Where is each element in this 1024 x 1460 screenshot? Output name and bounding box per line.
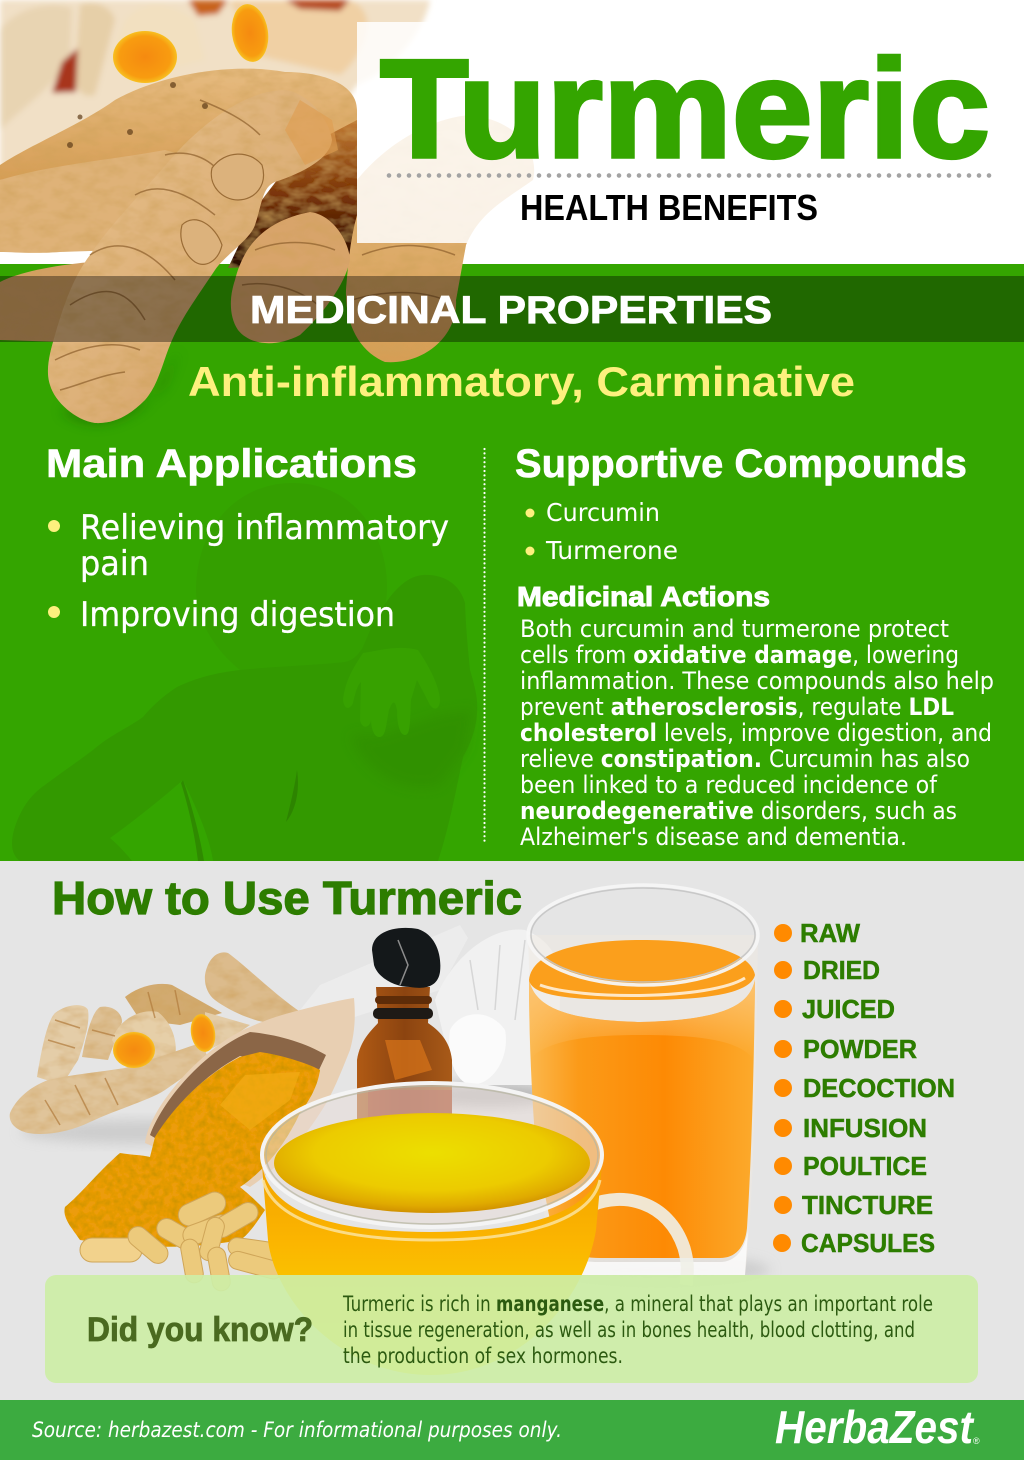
use form: decoction: DECOCTION xyxy=(803,1073,955,1103)
shadows xyxy=(20,1120,280,1144)
green medicinal section background xyxy=(0,264,1024,861)
illustration: turmeric roots header image xyxy=(0,0,534,424)
heading: supportive compounds: Supportive Compounds xyxy=(515,442,967,486)
medicinal properties band xyxy=(0,276,1024,342)
dark gap behind fingers xyxy=(228,120,357,268)
finger shadows on green xyxy=(60,350,180,424)
source note: Source: herbazest.com - For informational purposes only. xyxy=(32,1418,562,1442)
use form: infusion: INFUSION xyxy=(803,1113,927,1143)
panel: did you know xyxy=(45,1275,978,1383)
grey how-to-use section background xyxy=(0,861,1024,1400)
medicinal actions paragraph: Both curcumin and turmerone protect xyxy=(520,615,949,643)
title panel backdrop xyxy=(357,22,1024,243)
medicinal actions paragraph xyxy=(520,615,994,851)
heading: main applications: Main Applications xyxy=(46,442,417,486)
bullet item: relieving inflammatory pain: Relieving inflammatory xyxy=(80,508,449,548)
root knobs xyxy=(181,154,263,264)
heading: medicinal properties: MEDICINAL PROPERTIES xyxy=(250,289,772,332)
compound: turmerone: Turmerone xyxy=(545,536,678,565)
use form: poultice: POULTICE xyxy=(803,1151,927,1181)
medicinal actions paragraph: inflammation. These compounds also help xyxy=(520,667,994,695)
icon: capsules xyxy=(80,1188,284,1292)
panel: main applications xyxy=(46,442,449,635)
use form: dried: DRIED xyxy=(803,955,880,985)
did you know text: the production of sex hormones. xyxy=(343,1344,623,1368)
use form: capsules: CAPSULES xyxy=(801,1228,935,1258)
footer bar xyxy=(0,1400,1024,1460)
subtitle: HEALTH BENEFITS xyxy=(520,187,818,228)
heading: medicinal actions: Medicinal Actions xyxy=(517,581,770,612)
background blurred pale roots xyxy=(0,0,430,170)
compound: curcumin: Curcumin xyxy=(546,498,660,527)
medicinal actions paragraph: prevent atherosclerosis, regulate LDL xyxy=(520,693,954,721)
medicinal actions paragraph: cholesterol levels, improve digestion, and xyxy=(520,719,992,747)
use form: raw xyxy=(774,918,860,948)
medicinal actions paragraph: Alzheimer's disease and dementia. xyxy=(520,823,907,851)
bullet item: relieving inflammatory pain xyxy=(48,508,449,584)
main finger xyxy=(48,90,332,423)
use forms list xyxy=(773,918,955,1258)
icon: glass cup of turmeric tea xyxy=(262,1083,687,1375)
medicinal actions paragraph: relieve constipation. Curcumin has also xyxy=(520,745,970,773)
icon: poultice cloth bundle xyxy=(435,930,561,1085)
middle finger xyxy=(231,212,350,343)
column divider xyxy=(483,449,486,845)
left root xyxy=(0,150,240,253)
illustration: woman holding shoulder silhouette xyxy=(12,483,477,861)
heading: how to use turmeric: How to Use Turmeric xyxy=(52,872,522,924)
properties subtitle: Anti-inflammatory, Carminative xyxy=(188,358,855,405)
medicinal actions paragraph: cells from oxidative damage, lowering xyxy=(520,641,959,669)
use form: powder: POWDER xyxy=(803,1034,917,1064)
did you know heading: Did you know? xyxy=(87,1311,313,1349)
icon: pile of turmeric roots xyxy=(10,952,302,1134)
did you know text: Turmeric is rich in manganese, a mineral that plays an important role xyxy=(342,1292,933,1316)
back long root xyxy=(0,69,357,180)
logo: HerbaZest: HerbaZest xyxy=(775,1401,974,1453)
medicinal actions paragraph: been linked to a reduced incidence of xyxy=(520,771,938,799)
icon: amber dropper bottle xyxy=(357,928,452,1120)
icon: wooden scoop with turmeric powder xyxy=(64,998,355,1247)
logo: HerbaZest: ® xyxy=(973,1436,980,1446)
icon: glass dropper behind bottle xyxy=(300,925,468,1020)
title: Turmeric xyxy=(380,30,990,187)
panel: supportive compounds xyxy=(515,442,994,851)
medicinal actions paragraph: neurodegenerative disorders, such as xyxy=(520,797,957,825)
use form: raw: RAW xyxy=(800,918,860,948)
bullet item: relieving inflammatory pain: pain xyxy=(80,544,149,584)
use form: juiced: JUICED xyxy=(802,994,895,1024)
illustration: turmeric preparations xyxy=(10,885,770,1375)
cut slices on pale roots xyxy=(113,2,272,83)
right finger behind panel xyxy=(346,115,534,362)
use form: tincture: TINCTURE xyxy=(802,1190,933,1220)
icon: tall glass of turmeric juice xyxy=(528,885,758,1275)
bullet item: improving digestion: Improving digestion xyxy=(80,595,395,635)
dotted title divider xyxy=(389,173,992,178)
lower left stub xyxy=(0,262,90,342)
did you know text xyxy=(342,1292,933,1368)
